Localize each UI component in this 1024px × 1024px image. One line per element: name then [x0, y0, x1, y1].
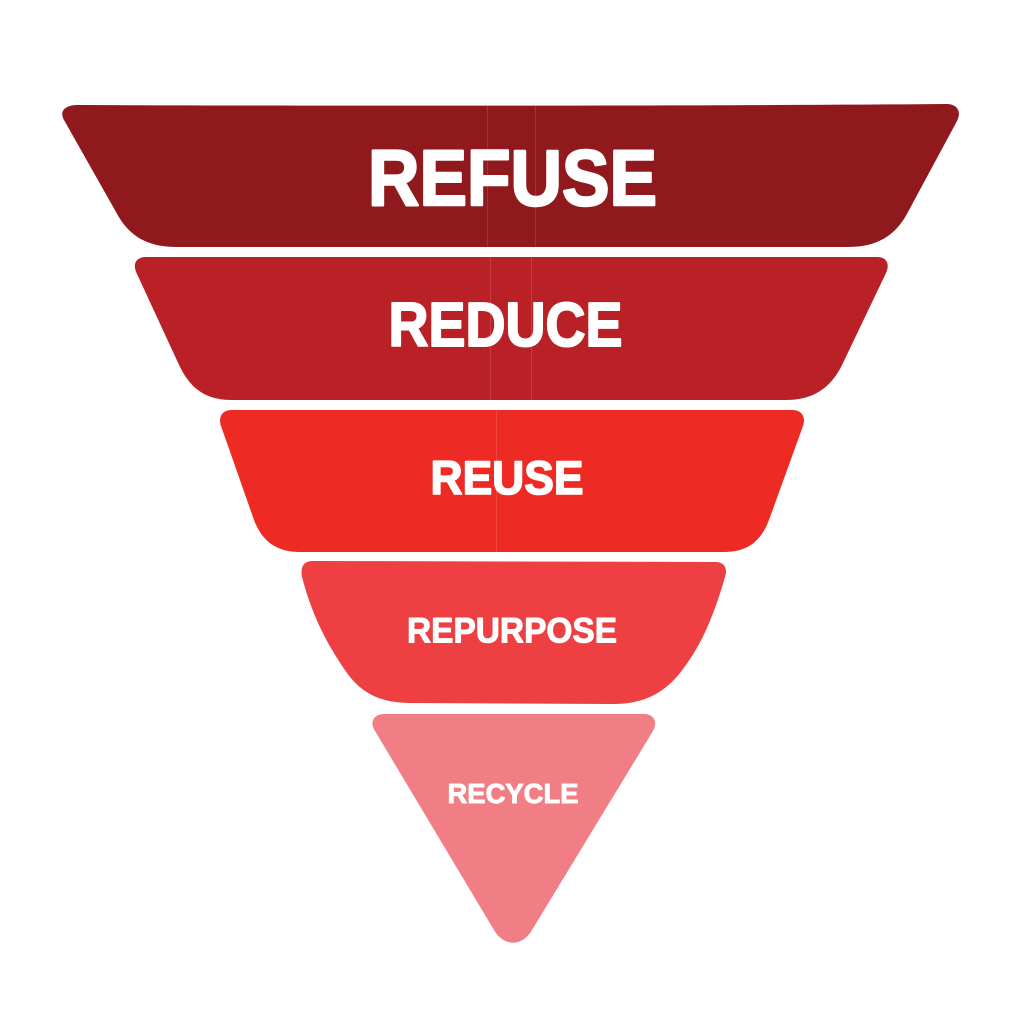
heading: reduce: REDUCE [388, 291, 622, 360]
heading: refuse: REFUSE [368, 133, 657, 222]
panel: repurpose tier [301, 561, 726, 704]
panel: refuse tier [62, 104, 959, 247]
panel: recycle tier [372, 714, 655, 943]
heading: reuse: REUSE [430, 451, 584, 504]
panel: reduce tier [135, 257, 888, 400]
heading: repurpose: REPURPOSE [407, 612, 617, 650]
heading: recycle: RECYCLE [448, 778, 578, 809]
panel: reuse tier [220, 410, 804, 552]
